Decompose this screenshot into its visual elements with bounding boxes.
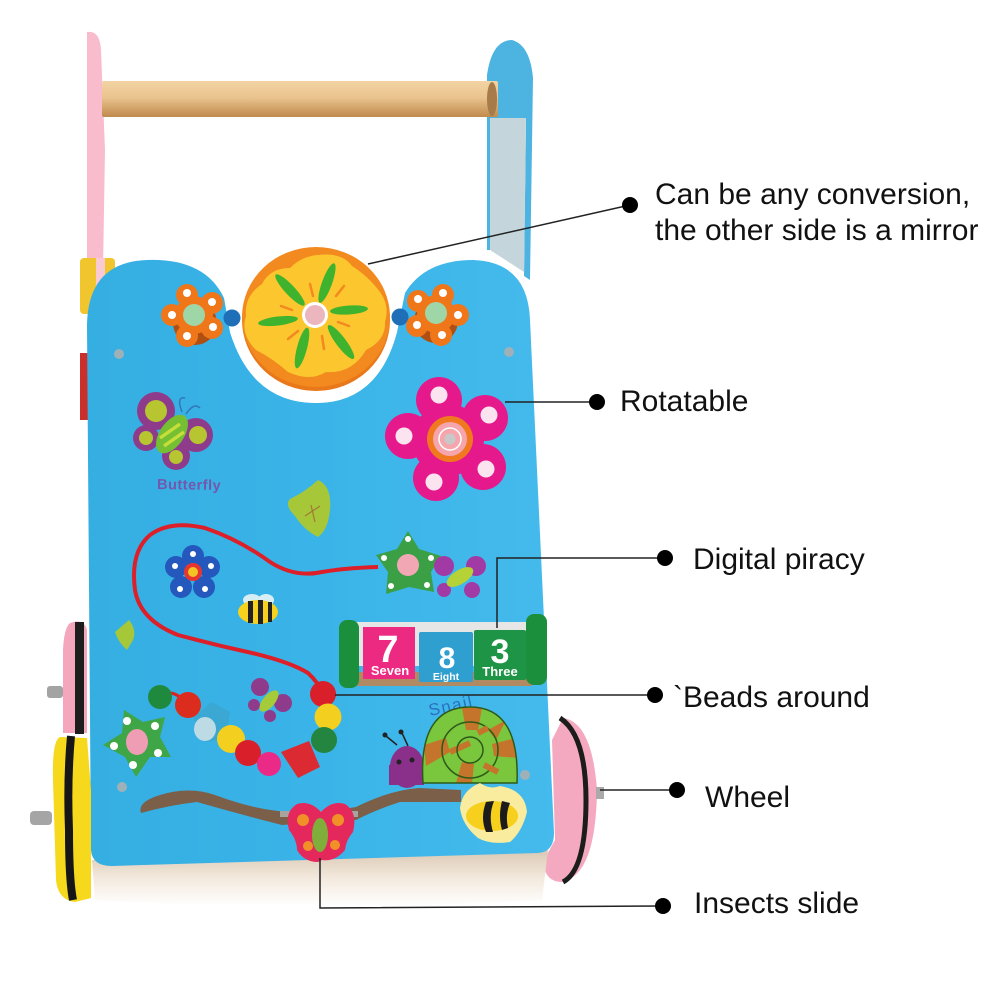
callout: wheel: Wheel: [705, 781, 790, 814]
insect slide track: [140, 783, 527, 862]
leaf decal with cross: [288, 480, 330, 537]
white notch ring around disc: [227, 260, 405, 403]
callout: beads around: [335, 681, 870, 714]
blue panel: [87, 260, 554, 866]
right pink wheel: [543, 718, 604, 882]
snail decal: Snail: [427, 692, 475, 720]
callout: conversion: Can be any conversion,: [655, 178, 970, 211]
small leaf decal: [115, 620, 134, 650]
callout: conversion: the other side is a mirror: [655, 214, 978, 247]
rotating disc: [242, 247, 390, 391]
back left wheel: [47, 622, 87, 734]
callout: digital piracy: Digital piracy: [693, 543, 865, 576]
small butterfly decal right: [434, 556, 486, 598]
front yellow wheel: [30, 736, 91, 902]
number blocks: 8: [439, 642, 455, 675]
floor shadow: [92, 850, 548, 906]
callout: wheel: [600, 781, 790, 814]
pink flower: [385, 377, 508, 501]
callout: rotatable: Rotatable: [620, 385, 748, 418]
number blocks: 7: [377, 629, 399, 671]
number blocks: Eight: [433, 671, 460, 683]
callout: insects slide: [320, 858, 859, 920]
callout: rotatable: [505, 385, 748, 418]
callout: beads around: `Beads around: [673, 681, 870, 714]
number blocks: 3: [491, 633, 509, 671]
blue flower decal: [165, 545, 220, 598]
callout: conversion: [368, 178, 978, 264]
butterfly decal: Butterfly: [157, 477, 221, 494]
snail decal: [382, 692, 520, 788]
number blocks: [339, 614, 547, 688]
small butterfly lower: [248, 678, 292, 722]
callout: insects slide: Insects slide: [694, 887, 859, 920]
bee decal: [238, 594, 278, 624]
wire bead maze: [134, 525, 378, 694]
bead string: [103, 681, 342, 778]
number blocks: Three: [482, 664, 518, 679]
butterfly decal: [133, 392, 221, 494]
number blocks: Seven: [371, 663, 409, 678]
small orange flowers with blue beads: [161, 284, 469, 347]
screws: [114, 347, 530, 792]
callout: digital piracy: [497, 543, 865, 628]
green star bead: [376, 531, 441, 594]
walker frame and handle: [80, 32, 533, 420]
